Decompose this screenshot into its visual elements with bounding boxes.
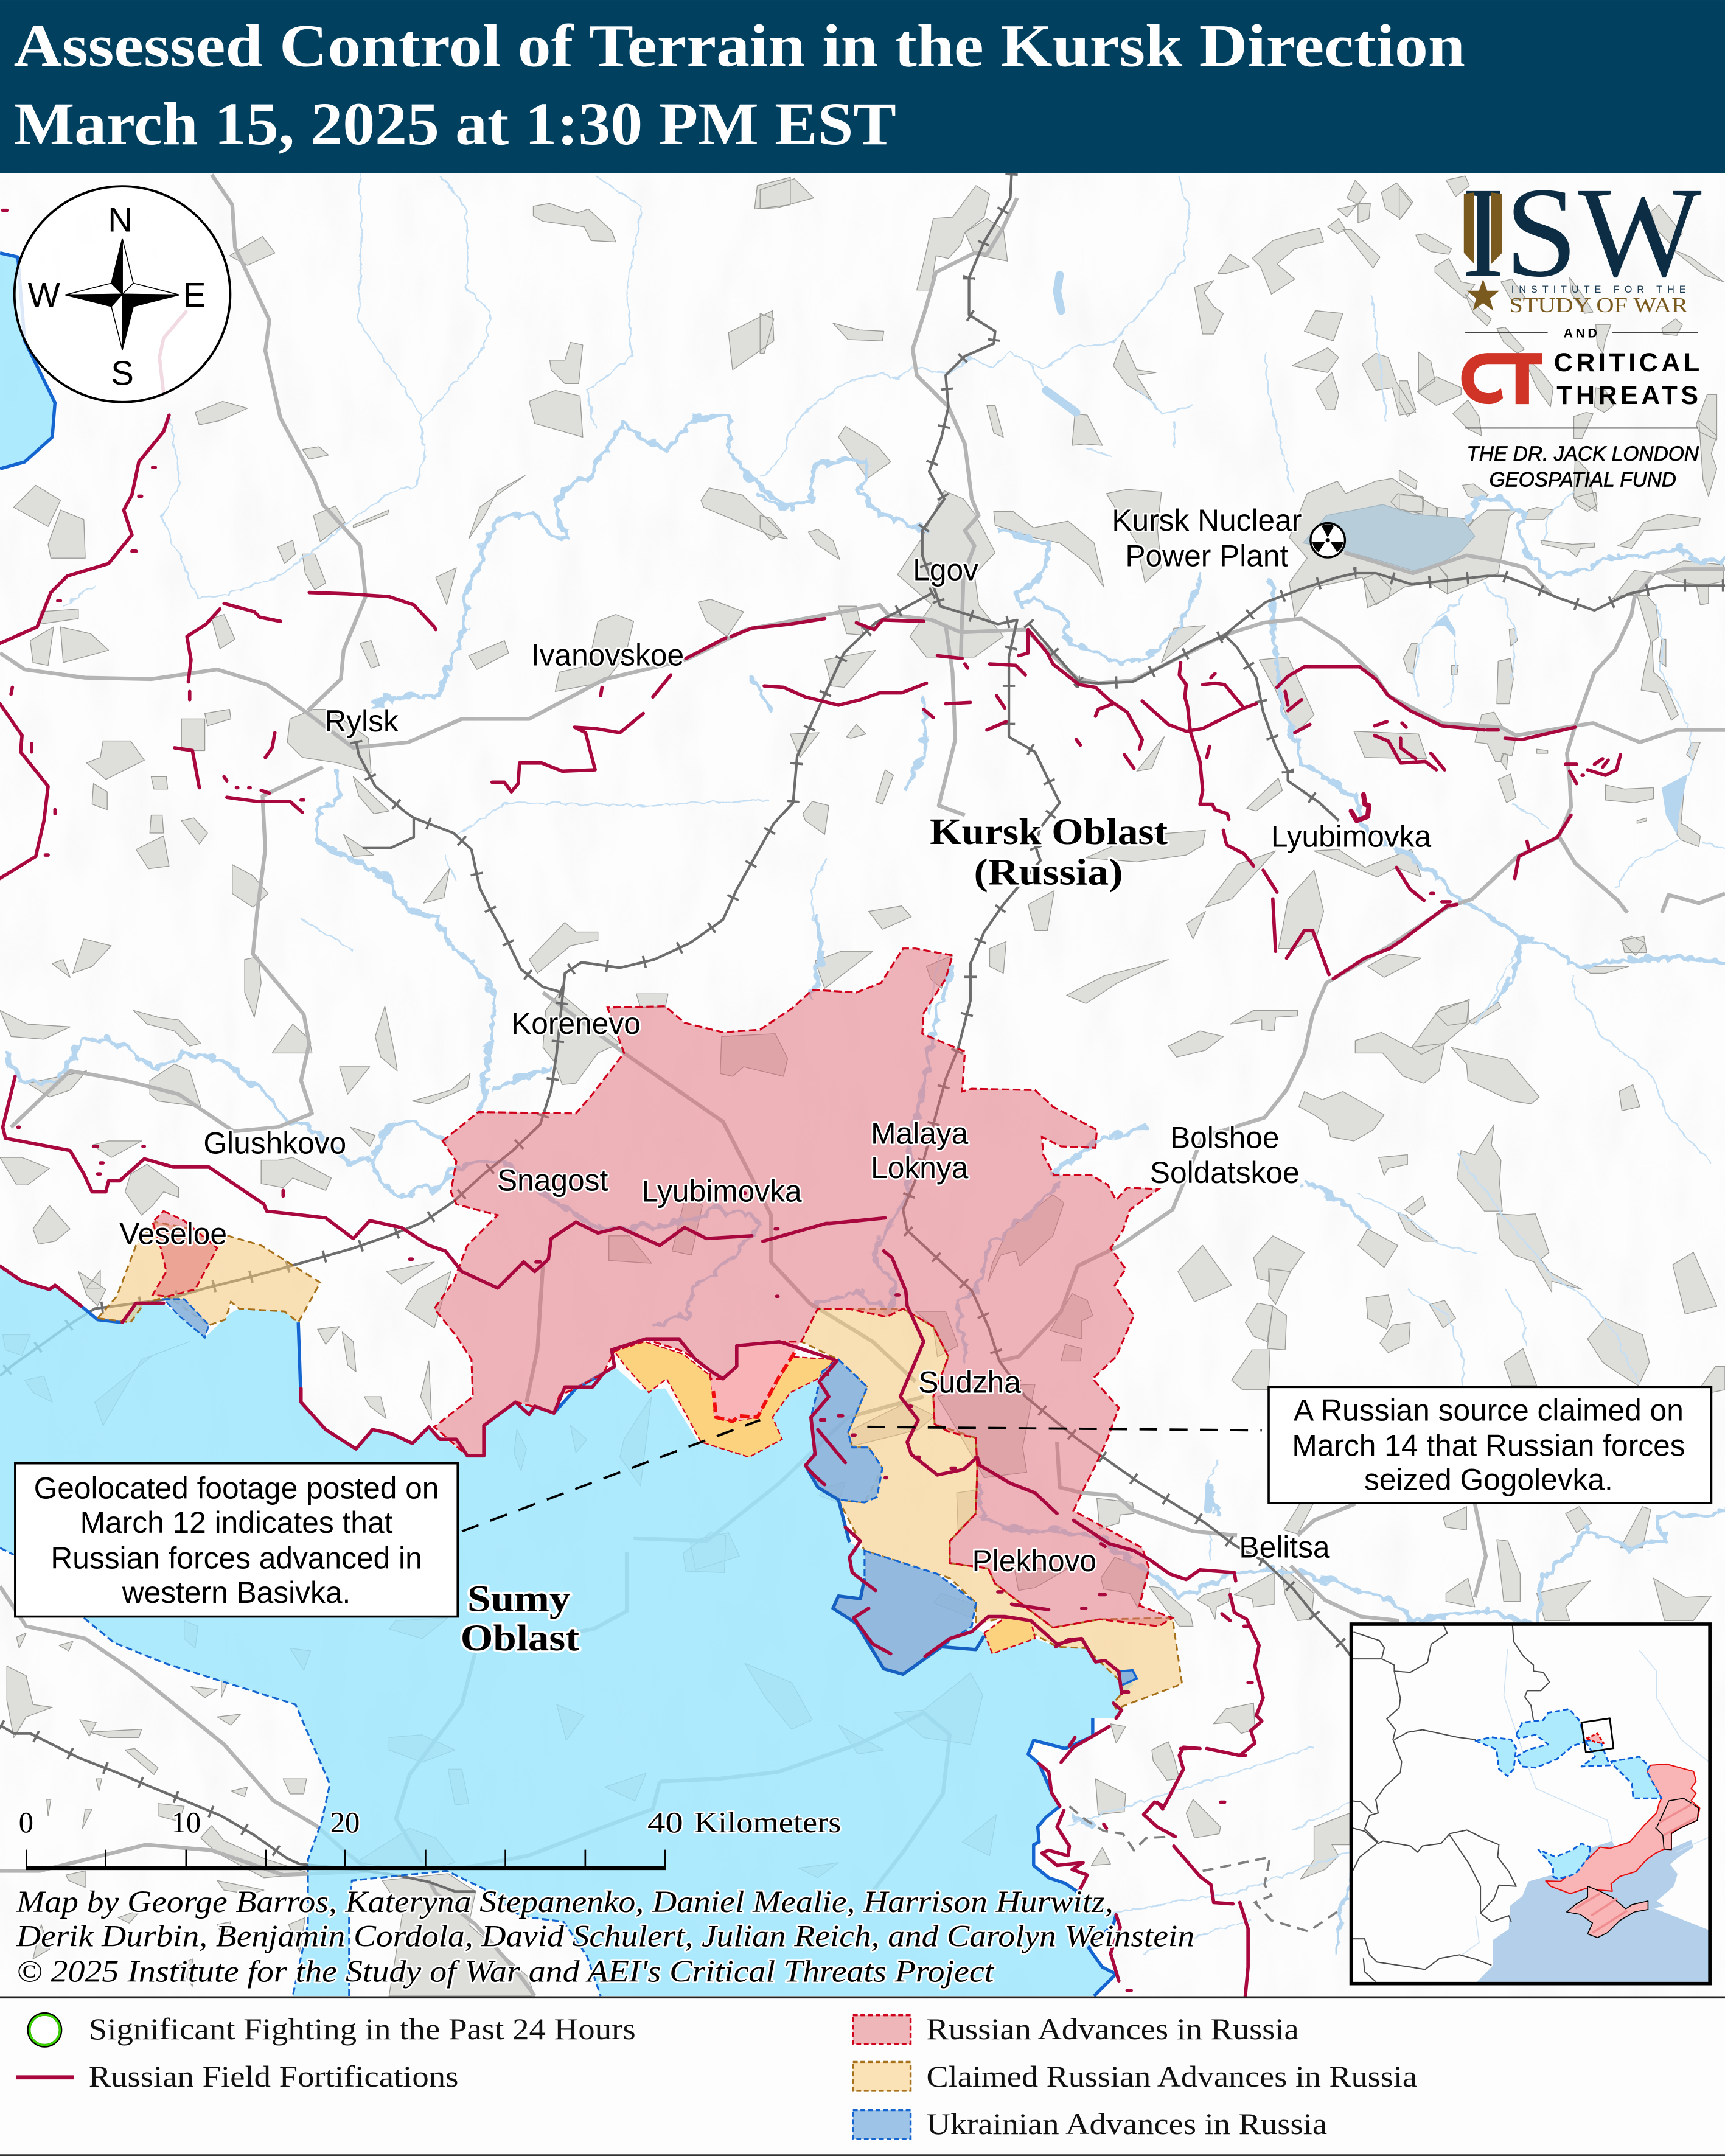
compass: S <box>111 354 134 392</box>
title header: March 15, 2025 at 1:30 PM EST <box>14 91 896 158</box>
callout: Gogolevka: A Russian source claimed on <box>1294 1394 1684 1428</box>
scale bar: 20 <box>330 1806 360 1839</box>
callout: Gogolevka: seized Gogolevka. <box>1364 1463 1613 1497</box>
thin streams <box>62 175 1725 1952</box>
legend: Ukrainian advances: Ukrainian Advances in Russia <box>927 2107 1327 2141</box>
scale bar <box>19 1806 841 1868</box>
Jack London Geospatial Fund credit: THE DR. JACK LONDON <box>1466 442 1699 466</box>
Russian advances in Russia <box>434 949 1173 1628</box>
credits: Derik Durbin, Benjamin Cordola, David Schulert, Julian Reich, and Carolyn Weinstein <box>16 1919 1194 1953</box>
compass: W <box>28 276 61 314</box>
legend: Russian field fortifications: Russian Field Fortifications <box>89 2060 458 2093</box>
claimed Russian advances: Basivka salient <box>615 1342 834 1457</box>
Ukrainian advances: Veseloe <box>164 1299 209 1338</box>
place label: Rylsk: Rylsk <box>324 704 399 738</box>
Russian advances: Veseloe <box>153 1211 217 1296</box>
scale bar: 40 <box>647 1806 683 1839</box>
place label: Plekhovo: Plekhovo <box>972 1544 1096 1578</box>
ISW logo: STUDY OF WAR <box>1509 293 1688 317</box>
ponds <box>1046 275 1688 1509</box>
Critical Threats logo: CRITICAL <box>1554 348 1699 377</box>
Ukrainian advances: small eastern patch <box>1118 1670 1137 1686</box>
fortification faded under compass <box>159 311 187 393</box>
place label: Lyubimovka south: Lyubimovka <box>641 1174 802 1208</box>
callout: western Basivka: Russian forces advanced in <box>51 1541 422 1575</box>
place label: Bolshoe Soldatskoe: Bolshoe <box>1170 1120 1280 1154</box>
Jack London Geospatial Fund credit <box>1466 442 1699 492</box>
compass: N <box>108 201 133 239</box>
callout: Gogolevka: March 14 that Russian forces <box>1292 1428 1685 1462</box>
place label: Malaya Loknya: Loknya <box>871 1151 969 1185</box>
place label: Lgov: Lgov <box>913 553 978 587</box>
place label: Kursk Nuclear Power Plant <box>1112 503 1302 573</box>
place label: Ivanovskoe: Ivanovskoe <box>531 638 684 672</box>
place label: Snagost: Snagost <box>497 1163 608 1197</box>
title header: Assessed Control of Terrain in the Kursk Direction <box>14 12 1465 79</box>
Ukrainian advances: south pocket <box>806 1465 984 1674</box>
scale bar: 0 <box>19 1806 33 1839</box>
region label: Kursk Oblast: (Russia) <box>974 853 1123 893</box>
callout: western Basivka <box>15 1463 458 1617</box>
region label: Kursk Oblast: Kursk Oblast <box>930 812 1168 853</box>
salient thick red edge <box>713 1353 795 1422</box>
legend: claimed Russian advances: Claimed Russian Advances in Russia <box>927 2060 1417 2093</box>
scale bar: Kilometers <box>694 1806 841 1839</box>
place label: Kursk Nuclear Power Plant: Power Plant <box>1125 539 1289 573</box>
place label: Bolshoe Soldatskoe: Soldatskoe <box>1150 1156 1300 1190</box>
reservoir: Kursk Nuclear Power Plant cooling lake <box>1303 504 1475 570</box>
callout: western Basivka: Geolocated footage posted on <box>34 1471 439 1505</box>
place label: Veseloe: Veseloe <box>119 1216 227 1251</box>
ISW logo: ISW <box>1461 161 1702 304</box>
callout: western Basivka: western Basivka. <box>122 1575 350 1610</box>
place label: Malaya Loknya <box>871 1116 969 1185</box>
Ukrainian advances: north of Sudzha pocket <box>806 1359 882 1502</box>
legend: significant fighting: Significant Fighting in the Past 24 Hours <box>89 2012 636 2046</box>
inset locator map <box>1351 1624 1710 1984</box>
place label: Belitsa: Belitsa <box>1239 1530 1330 1564</box>
compass <box>15 186 230 402</box>
place label: Lyubimovka north: Lyubimovka <box>1271 820 1432 854</box>
place label: Glushkovo: Glushkovo <box>203 1126 346 1160</box>
scale bar: 10 <box>172 1806 201 1839</box>
rivers <box>3 413 1725 1952</box>
place label: Malaya Loknya: Malaya <box>871 1116 969 1150</box>
claimed Russian advances: Sudzha <box>801 1309 1182 1709</box>
region label: Sumy Oblast: Sumy <box>467 1579 570 1620</box>
Russian advances: Basivka salient <box>711 1342 800 1422</box>
region label: Kursk Oblast <box>930 812 1168 893</box>
logo separator with AND: AND <box>1564 326 1597 341</box>
Critical Threats logo: THREATS <box>1556 381 1698 410</box>
Critical Threats logo <box>1462 348 1699 410</box>
callout leader lines <box>462 1420 1262 1532</box>
place label: Korenevo: Korenevo <box>511 1006 641 1041</box>
claimed Russian advances: strong patch south of Plekhovo <box>984 1618 1035 1654</box>
claimed Russian advances: Veseloe <box>97 1222 320 1325</box>
place label: Bolshoe Soldatskoe <box>1150 1120 1300 1190</box>
ISW logo: INSTITUTE FOR THE <box>1511 284 1686 295</box>
Russian field fortifications <box>0 211 1620 1996</box>
icon: nuclear power plant <box>1311 523 1345 557</box>
Jack London Geospatial Fund credit: GEOSPATIAL FUND <box>1490 469 1676 492</box>
callout: western Basivka: March 12 indicates that <box>80 1505 393 1540</box>
dashed border <box>1069 1806 1339 1931</box>
credits: Map by George Barros, Kateryna Stepanenko, Daniel Mealie, Harrison Hurwitz, <box>16 1885 1113 1919</box>
logo separator <box>1465 427 1698 428</box>
credits <box>16 1885 1194 1988</box>
Ukrainian-held territory (Sumy Oblast) <box>0 253 1134 1996</box>
region label: Sumy Oblast <box>461 1579 580 1659</box>
place label: Sudzha: Sudzha <box>918 1365 1021 1399</box>
railways <box>0 173 1725 1891</box>
credits: © 2025 Institute for the Study of War and AEI's Critical Threats Project <box>16 1954 995 1988</box>
legend panel <box>0 1997 1725 2156</box>
place label: Kursk Nuclear Power Plant: Kursk Nuclear <box>1112 503 1302 537</box>
callout: Gogolevka <box>1269 1387 1711 1503</box>
legend: Russian advances: Russian Advances in Russia <box>927 2012 1299 2046</box>
region label: Sumy Oblast: Oblast <box>461 1618 580 1659</box>
compass: E <box>183 276 206 314</box>
title header <box>0 0 1725 173</box>
